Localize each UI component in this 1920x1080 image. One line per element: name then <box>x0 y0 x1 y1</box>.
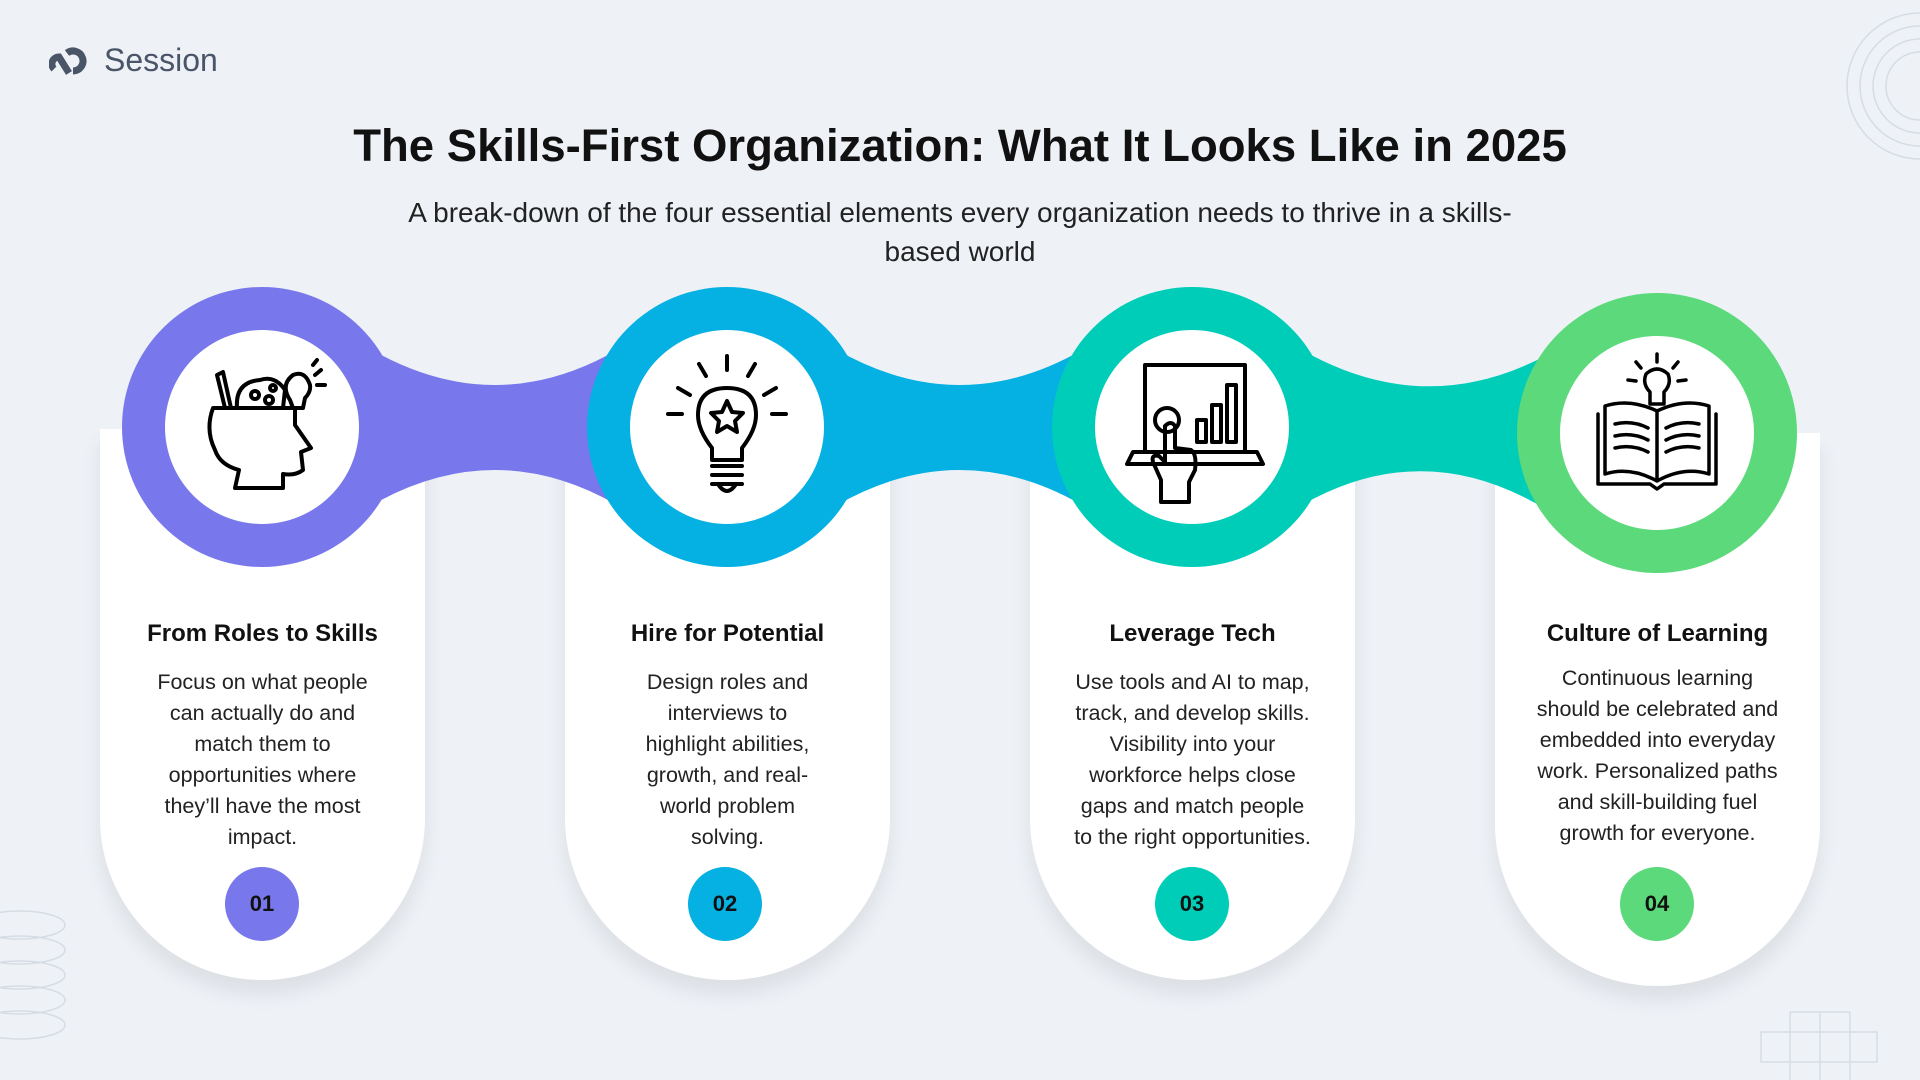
card 4 text: embedded into everyday <box>1540 728 1775 752</box>
icon circle 2: bulb <box>587 287 867 567</box>
subtitle: A break-down of the four essential elements every organization needs to thrive in a skills-based world <box>408 197 1512 267</box>
card 4 text: Culture of Learning <box>1547 620 1768 647</box>
card 2 text: growth, and real- <box>647 763 808 787</box>
card 3 text: Use tools and AI to map, <box>1075 670 1310 694</box>
card 1 text: Focus on what people <box>157 670 368 694</box>
card 1 text: can actually do and <box>170 701 355 725</box>
card 4 text: and skill-building fuel <box>1558 790 1757 814</box>
card 2 text: Hire for Potential <box>631 620 824 647</box>
card 3 text: track, and develop skills. <box>1075 701 1310 725</box>
card 4 text: work. Personalized paths <box>1537 759 1778 783</box>
icon circle 1: head <box>122 287 402 567</box>
card 1 text <box>147 620 378 941</box>
card 3 text: Visibility into your <box>1110 732 1275 756</box>
icon circle 3: laptop chart <box>1052 287 1332 567</box>
card 3 text: 03 <box>1180 891 1204 916</box>
logo: Session <box>104 42 218 78</box>
card 4 text: 04 <box>1645 891 1669 916</box>
card 1 text: opportunities where <box>169 763 356 787</box>
logo <box>49 42 218 78</box>
card 1 text: match them to <box>194 732 331 756</box>
card 1 text: impact. <box>228 825 297 849</box>
card 2 text: highlight abilities, <box>646 732 809 756</box>
card 1 text: 01 <box>250 891 274 916</box>
card 1 text: they’ll have the most <box>164 794 360 818</box>
card 2 text: world problem <box>660 794 795 818</box>
card 4 text <box>1537 620 1778 941</box>
card 2 text: interviews to <box>668 701 787 725</box>
card 3 text: to the right opportunities. <box>1074 825 1311 849</box>
card 4 text: Continuous learning <box>1562 666 1753 690</box>
card 3 text <box>1074 620 1311 941</box>
card 3 text: gaps and match people <box>1081 794 1304 818</box>
title: The Skills-First Organization: What It Looks Like in 2025 <box>353 120 1567 171</box>
decoration top right circles <box>1846 12 1920 160</box>
decoration bottom right grid <box>1760 1011 1878 1080</box>
card 2 text <box>631 620 824 941</box>
cards <box>100 429 425 980</box>
card 2 text: 02 <box>713 891 737 916</box>
card 4 text: growth for everyone. <box>1560 821 1756 845</box>
decoration bottom left rings <box>0 910 66 1040</box>
icon circle 4: book <box>1517 293 1797 573</box>
card 3 text: Leverage Tech <box>1109 620 1276 647</box>
card 2 text: solving. <box>691 825 764 849</box>
card 3 text: workforce helps close <box>1089 763 1296 787</box>
card 4 text: should be celebrated and <box>1537 697 1778 721</box>
card 1 text: From Roles to Skills <box>147 620 378 647</box>
card 2 text: Design roles and <box>647 670 808 694</box>
